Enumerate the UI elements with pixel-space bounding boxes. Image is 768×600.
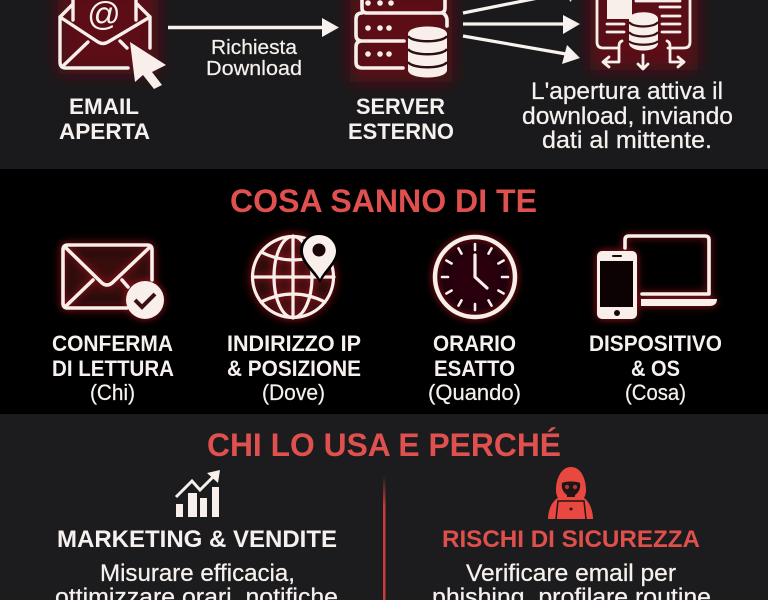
label: (Cosa): [625, 380, 686, 405]
heading: chi lo usa e perché: CHI LO USA E PERCHÉ: [207, 427, 561, 463]
label: DISPOSITIVO: [589, 331, 722, 356]
item: dispositivo e os: [589, 236, 722, 405]
icon: globe with pin: [252, 233, 339, 318]
label: ESATTO: [434, 356, 515, 381]
label: server esterno: SERVER: [356, 94, 445, 119]
label: & OS: [631, 356, 680, 381]
label: server esterno: ESTERNO: [348, 119, 454, 144]
heading: cosa sanno di te: COSA SANNO DI TE: [230, 183, 537, 219]
label: ORARIO: [433, 331, 516, 356]
text: marketing description: [55, 560, 338, 600]
label: email aperta: [59, 94, 150, 144]
icon: data document: [590, 0, 698, 70]
heading: marketing: MARKETING & VENDITE: [57, 526, 337, 553]
column: rischi di sicurezza: [432, 467, 711, 600]
label: server esterno: [348, 94, 454, 144]
icon: open email with cursor: [58, 0, 166, 89]
label: & POSIZIONE: [227, 356, 361, 381]
icon: phone and laptop: [597, 236, 717, 319]
icon: hacker: [548, 467, 593, 519]
heading: rischi: RISCHI DI SICUREZZA: [442, 526, 700, 553]
arrows: data sent: [463, 0, 582, 64]
label: [428, 331, 521, 405]
label: INDIRIZZO IP: [227, 331, 361, 356]
column: marketing e vendite: [55, 470, 338, 600]
label: email aperta: APERTA: [59, 119, 150, 144]
label: richiesta download: [206, 37, 302, 80]
text: rischi description: Verificare email per: [466, 560, 676, 587]
icon: external server with database: [350, 0, 452, 82]
label: [227, 331, 361, 405]
label: [52, 331, 174, 405]
label: DI LETTURA: [52, 356, 174, 381]
label: richiesta download: Richiesta: [211, 37, 298, 59]
divider: [383, 476, 386, 600]
item: indirizzo ip: [227, 233, 361, 405]
icon: growth chart: [176, 470, 220, 517]
label: (Chi): [90, 380, 135, 405]
label: (Quando): [428, 380, 521, 405]
text: rischi description: [432, 560, 711, 600]
label: [589, 331, 722, 405]
text: l'apertura attiva il download: [522, 78, 733, 154]
text: marketing description: Misurare efficacia,: [100, 560, 295, 587]
icon: envelope with check: [63, 245, 164, 319]
arrow: richiesta: [168, 18, 339, 37]
item: conferma di lettura: [52, 245, 174, 405]
item: orario esatto: [428, 237, 521, 405]
panel: come funziona: [0, 0, 768, 169]
label: richiesta download: Download: [206, 58, 302, 80]
text: l'apertura attiva il download: L'apertura attiva il: [531, 78, 723, 105]
label: (Dove): [262, 380, 325, 405]
text: l'apertura attiva il download: dati al mittente.: [542, 127, 712, 154]
icon: clock: [435, 237, 515, 317]
panel: cosa sanno di te: [0, 169, 768, 414]
label: CONFERMA: [52, 331, 173, 356]
text: l'apertura attiva il download: download, inviando: [522, 103, 733, 130]
panel: chi lo usa e perché: [0, 414, 768, 600]
label: email aperta: EMAIL: [69, 94, 139, 119]
